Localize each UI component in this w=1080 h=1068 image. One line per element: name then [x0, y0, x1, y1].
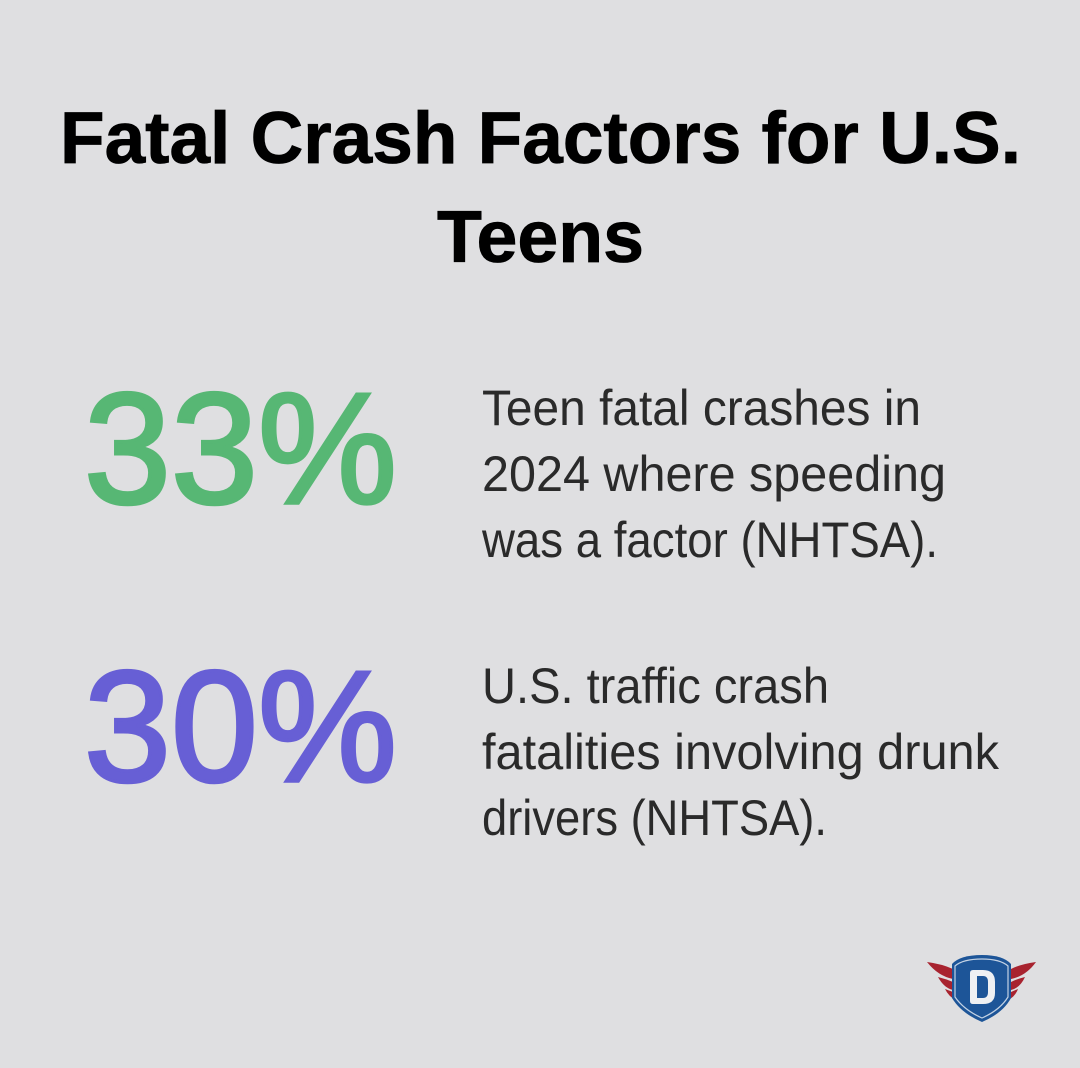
description: drunk drivers: fatalities involving drunk — [482, 724, 1000, 780]
stat: 30 percent: 30% — [84, 639, 397, 815]
description: speeding — [481, 380, 946, 568]
description: drunk drivers: drivers (NHTSA). — [482, 790, 827, 846]
description: drunk drivers: U.S. traffic crash — [482, 658, 829, 714]
title: Teens — [437, 197, 644, 278]
title: Fatal Crash Factors for U.S. — [60, 98, 1021, 179]
description: speeding: 2024 where speeding — [482, 446, 946, 502]
description: speeding: Teen fatal crashes in — [482, 380, 921, 436]
icon: winged shield logo — [927, 955, 1036, 1022]
description: speeding: was a factor (NHTSA). — [481, 512, 938, 568]
title — [60, 98, 1021, 278]
stat: 33 percent: 33% — [84, 361, 397, 537]
description: drunk drivers — [482, 658, 1000, 846]
